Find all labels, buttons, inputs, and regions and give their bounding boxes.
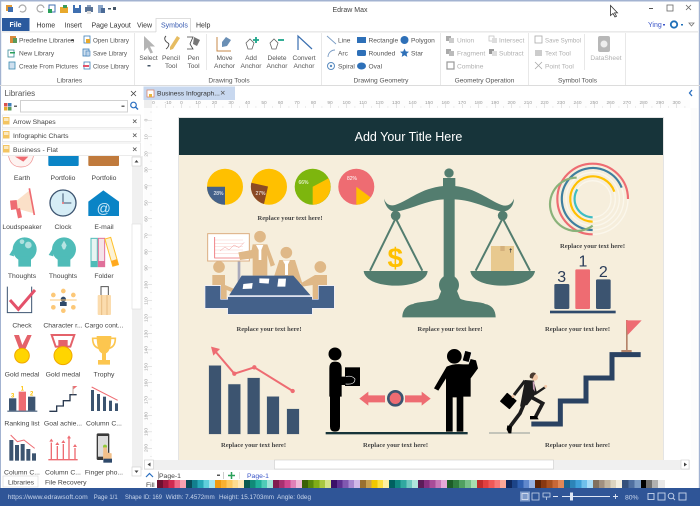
chart: ranking podium: 3 bbox=[557, 269, 566, 286]
ribbon group: drawing tools: Pen bbox=[188, 55, 200, 62]
title banner: Add Your Title Here bbox=[355, 130, 462, 144]
horizontal ruler: 140 bbox=[408, 100, 417, 106]
ribbon group: geometry operation: Fragment bbox=[457, 50, 485, 58]
icon: ranking list: 3 bbox=[11, 393, 15, 399]
document tab bar bbox=[143, 86, 698, 100]
icon: column chart 2 bbox=[9, 435, 36, 461]
ribbon group: geometry operation: Geometry Operation bbox=[455, 78, 515, 84]
icon: select arrow bbox=[144, 36, 155, 54]
icon: pencil tool bbox=[165, 36, 180, 50]
chart: ranking podium bbox=[550, 254, 616, 313]
ribbon group: drawing geometry: Polygon bbox=[411, 38, 435, 44]
fit buttons bbox=[648, 493, 686, 500]
ribbon group: symbol tools bbox=[535, 36, 622, 84]
sidebar grid labels: Goal achie... bbox=[44, 420, 82, 428]
vertical ruler: 130 bbox=[144, 330, 150, 338]
vertical ruler: 60 bbox=[144, 216, 150, 222]
vertical ruler: 200 bbox=[144, 444, 150, 452]
horizontal ruler: 260 bbox=[606, 100, 615, 106]
app title: Edraw Max bbox=[332, 7, 368, 14]
illustration: businessman climbing stairs bbox=[489, 320, 642, 434]
icon: ranking list bbox=[7, 387, 37, 412]
ribbon group: drawing tools: Tool bbox=[165, 63, 178, 70]
sidebar grid labels: Finger pho... bbox=[85, 470, 123, 476]
ribbon group: drawing tools bbox=[139, 36, 316, 84]
pie 27%: 27% bbox=[256, 191, 266, 197]
horizontal ruler: 180 bbox=[474, 100, 483, 106]
vertical ruler: 190 bbox=[144, 428, 150, 436]
icon: pen tool bbox=[187, 37, 200, 49]
sidebar grid: first row shapes bbox=[8, 155, 119, 267]
sidebar grid: lower shapes bbox=[7, 287, 118, 463]
horizontal ruler: 170 bbox=[458, 100, 466, 106]
icon: goal achievement bbox=[49, 386, 77, 411]
ribbon group: drawing tools: Anchor bbox=[214, 63, 236, 70]
horizontal ruler bbox=[144, 100, 690, 108]
quick access toolbar bbox=[6, 5, 116, 14]
flag bbox=[621, 320, 642, 353]
vertical ruler: 0 bbox=[144, 118, 150, 121]
icon: e-mail: @ bbox=[97, 200, 111, 216]
ribbon tabs bbox=[2, 18, 211, 32]
sidebar grid labels: Portfolio bbox=[51, 175, 76, 182]
panel: infographic page bbox=[178, 117, 664, 460]
businessman bbox=[500, 372, 547, 433]
icon: move anchor bbox=[217, 37, 231, 51]
caption: rings: Replace your text here! bbox=[560, 243, 625, 250]
sidebar grid labels: Column C... bbox=[86, 420, 122, 428]
vertical ruler: 90 bbox=[144, 265, 150, 271]
horizontal ruler: 240 bbox=[573, 100, 582, 106]
vertical ruler: 110 bbox=[144, 297, 150, 305]
status text: Width: 7.4572mm bbox=[166, 494, 215, 501]
icon: trophy bbox=[93, 336, 115, 365]
ribbon group: libraries: Create From Pictures bbox=[19, 64, 79, 70]
horizontal ruler: 40 bbox=[245, 100, 250, 106]
horizontal ruler: 80 bbox=[311, 100, 316, 106]
zoom slider: 80% bbox=[625, 494, 639, 502]
icon: thoughts head 2 bbox=[49, 237, 76, 267]
horizontal ruler: 120 bbox=[375, 100, 384, 106]
pie 66%: 66% bbox=[298, 180, 309, 186]
horizontal ruler: 10 bbox=[195, 100, 201, 106]
icon: mouse cursor bbox=[610, 6, 618, 17]
horizontal ruler: 210 bbox=[524, 100, 532, 106]
icon: folder binders bbox=[91, 237, 119, 267]
panel: libraries sidebar bbox=[1, 86, 143, 488]
vertical ruler: 170 bbox=[144, 396, 150, 404]
sidebar grid labels: Trophy bbox=[94, 372, 115, 378]
ribbon tabs: View bbox=[137, 22, 153, 30]
ribbon group: drawing geometry: Oval bbox=[368, 64, 383, 70]
vertical ruler: 30 bbox=[144, 167, 150, 173]
ribbon group: libraries: New Library bbox=[19, 50, 55, 58]
horizontal ruler: 190 bbox=[491, 100, 499, 106]
icon: finger on phone bbox=[97, 433, 112, 463]
ribbon group: drawing tools: Add bbox=[245, 55, 257, 62]
active symbols tab bbox=[156, 18, 190, 32]
icon: dollar sign: $ bbox=[388, 242, 404, 273]
ribbon group: drawing tools: Anchor bbox=[294, 63, 315, 70]
file tab bbox=[2, 18, 30, 31]
ribbon group: drawing tools: Anchor bbox=[267, 63, 288, 70]
sidebar grid labels: Folder bbox=[94, 273, 114, 280]
sidebar grid labels: E-mail bbox=[94, 224, 114, 231]
icon: datasheet bbox=[598, 36, 610, 52]
horizontal ruler: 20 bbox=[212, 100, 217, 106]
vertical ruler: 40 bbox=[144, 184, 150, 190]
illustration: business meeting bbox=[205, 231, 334, 314]
icon: clock bbox=[50, 190, 76, 216]
horizontal ruler: 220 bbox=[540, 100, 549, 106]
ribbon group: symbol tools: Save Symbol bbox=[545, 38, 581, 44]
ribbon tabs: Page Layout bbox=[92, 22, 131, 30]
ribbon group: symbol tools: Symbol Tools bbox=[558, 78, 598, 84]
sidebar bottom tabs: Libraries bbox=[8, 480, 35, 486]
horizontal ruler: 150 bbox=[425, 100, 433, 106]
vertical ruler: 50 bbox=[144, 200, 150, 206]
ribbon group: libraries: Predefine Libraries bbox=[19, 38, 75, 44]
library row: infographic charts bbox=[2, 129, 140, 142]
horizontal ruler: 300 bbox=[672, 100, 681, 106]
sidebar grid labels: Gold medal bbox=[46, 372, 81, 378]
ribbon group: drawing tools: Delete bbox=[267, 55, 287, 62]
sidebar grid labels: Ranking list bbox=[4, 420, 40, 428]
pie 27% bbox=[251, 169, 287, 205]
title banner bbox=[179, 118, 663, 155]
ribbon group: geometry operation: Union bbox=[457, 38, 475, 44]
horizontal ruler: 0 bbox=[152, 100, 155, 106]
sidebar grid labels: Character r... bbox=[43, 322, 83, 330]
horizontal ruler: -10 bbox=[165, 100, 172, 106]
chart: radial progress rings bbox=[550, 164, 628, 234]
ribbon group: drawing geometry: Spiral bbox=[338, 64, 355, 70]
ribbon group: drawing geometry: Drawing Geometry bbox=[354, 78, 409, 84]
vertical ruler: 20 bbox=[144, 151, 150, 157]
ribbon group: drawing geometry: Star bbox=[411, 50, 424, 58]
person with document bbox=[328, 347, 360, 432]
illustration: balance scale bbox=[364, 168, 535, 317]
status text: Angle: 0deg bbox=[277, 494, 311, 501]
colour palette bbox=[157, 480, 665, 488]
stairs bbox=[531, 355, 641, 424]
icon: gold medal ribbon bbox=[52, 335, 74, 365]
horizontal ruler: 70 bbox=[294, 100, 300, 106]
ribbon group: libraries: Libraries bbox=[57, 78, 83, 84]
sidebar grid labels bbox=[2, 175, 124, 476]
pie 82% bbox=[338, 169, 374, 205]
library row: arrow shapes: Arrow Shapes bbox=[13, 119, 56, 126]
sidebar grid labels: Cargo cont... bbox=[85, 322, 124, 330]
icon: earth bbox=[8, 155, 34, 167]
icon: thoughts head 1 bbox=[9, 237, 37, 267]
illustration: two people exchange bbox=[326, 347, 478, 434]
user menu: Ying bbox=[648, 22, 662, 29]
ribbon group: symbol tools: DataSheet bbox=[590, 55, 622, 62]
ribbon group: symbol tools: Point Tool bbox=[545, 64, 574, 70]
library row: arrow shapes bbox=[2, 115, 140, 128]
library row: infographic charts: Infographic Charts bbox=[13, 133, 69, 140]
icon: check bbox=[7, 287, 35, 313]
window controls bbox=[648, 5, 694, 29]
icon: character relation bbox=[50, 289, 77, 313]
sidebar grid labels: Column C... bbox=[45, 470, 81, 476]
horizontal ruler: 200 bbox=[507, 100, 516, 106]
horizontal ruler: 160 bbox=[441, 100, 450, 106]
ribbon group: geometry operation: Intersect bbox=[499, 38, 524, 44]
ribbon group: geometry operation: Combine bbox=[457, 64, 484, 70]
view buttons bbox=[520, 492, 550, 502]
ribbon group: drawing geometry: Rectangle bbox=[368, 38, 399, 44]
vertical ruler bbox=[144, 108, 152, 460]
ribbon body bbox=[0, 32, 700, 86]
ribbon group: drawing tools: Select bbox=[139, 55, 158, 62]
horizontal ruler: 130 bbox=[392, 100, 400, 106]
vertical ruler: 140 bbox=[144, 346, 150, 354]
pie 28%: 28% bbox=[214, 191, 224, 197]
sidebar grid labels: Column C... bbox=[4, 470, 40, 476]
ribbon group: libraries: Save Library bbox=[93, 50, 128, 58]
chart: ranking podium: 2 bbox=[599, 264, 608, 281]
page tab bar: Fill bbox=[146, 482, 155, 489]
person on phone bbox=[434, 349, 478, 432]
file tab: File bbox=[9, 22, 22, 29]
sidebar bottom tabs bbox=[3, 476, 87, 487]
ribbon group: drawing tools: Pencil bbox=[162, 55, 181, 62]
chart: declining bar chart bbox=[209, 347, 299, 434]
ribbon tabs: Insert bbox=[64, 22, 82, 30]
ribbon group: symbol tools: Text Tool bbox=[545, 50, 571, 58]
caption: scale: Replace your text here! bbox=[418, 326, 482, 333]
icon: blue portfolio bbox=[48, 155, 79, 166]
horizontal ruler: 280 bbox=[639, 100, 648, 106]
sidebar bottom tabs: File Recovery bbox=[45, 480, 87, 486]
vertical ruler: 100 bbox=[144, 281, 150, 289]
active symbols tab: Symbols bbox=[161, 22, 188, 30]
caption: exchange: Replace your text here! bbox=[363, 442, 428, 449]
horizontal ruler: 0 bbox=[180, 100, 183, 106]
icon: brown portfolio bbox=[88, 155, 119, 166]
horizontal ruler: 30 bbox=[228, 100, 234, 106]
caption: bar chart: Replace your text here! bbox=[221, 442, 286, 449]
ribbon group: drawing geometry: Line bbox=[338, 38, 351, 44]
caption: pies: Replace your text here! bbox=[258, 215, 322, 222]
vertical ruler: 80 bbox=[144, 249, 150, 255]
caption: meeting: Replace your text here! bbox=[236, 326, 302, 333]
chart: ranking podium: 1 bbox=[579, 254, 588, 271]
sidebar header bbox=[1, 86, 143, 156]
library search box bbox=[4, 100, 138, 112]
library row: business flat bbox=[2, 143, 140, 156]
page tab bar: Page-1 bbox=[247, 473, 269, 480]
ribbon group: drawing tools: Anchor bbox=[241, 63, 262, 70]
document tab bbox=[144, 86, 235, 100]
horizontal ruler: 270 bbox=[623, 100, 631, 106]
icon: ranking list: 2 bbox=[30, 391, 34, 397]
icon: column chart with red arrows bbox=[48, 435, 78, 460]
horizontal ruler: 110 bbox=[359, 100, 367, 106]
pie 28% bbox=[207, 169, 243, 205]
horizontal ruler: 230 bbox=[557, 100, 565, 106]
horizontal ruler: 250 bbox=[590, 100, 598, 106]
sidebar grid labels: Check bbox=[12, 322, 32, 330]
vertical ruler: 180 bbox=[144, 412, 150, 420]
canvas workspace bbox=[152, 108, 690, 460]
ribbon tabs: Help bbox=[196, 22, 211, 30]
status text: Page 1/1 bbox=[94, 494, 118, 501]
trend arrow bbox=[211, 347, 295, 393]
pie 82%: 82% bbox=[347, 176, 358, 182]
icon: convert anchor bbox=[298, 36, 312, 50]
page tab bar: Page-1 bbox=[159, 473, 181, 480]
ribbon group: libraries bbox=[8, 36, 130, 84]
vertical ruler: 10 bbox=[144, 134, 150, 140]
ribbon group: libraries: Open Library bbox=[93, 38, 130, 44]
icon: gold medal bbox=[14, 335, 32, 363]
status text bbox=[8, 494, 311, 501]
ribbon group: drawing tools: Tool bbox=[187, 63, 200, 70]
sidebar header: Libraries bbox=[4, 89, 35, 98]
ribbon group: geometry operation bbox=[446, 36, 524, 84]
sidebar grid labels: Loudspeaker bbox=[2, 224, 42, 231]
horizontal ruler: 290 bbox=[656, 100, 664, 106]
sidebar grid labels: Thoughts bbox=[49, 273, 78, 280]
pie 66% bbox=[295, 169, 331, 205]
horizontal scrollbar bbox=[144, 108, 698, 470]
icon: cardboard box bbox=[491, 246, 514, 271]
ribbon group: libraries: Close Library bbox=[93, 64, 130, 70]
ribbon group: drawing tools: Convert bbox=[292, 55, 316, 62]
status bar bbox=[0, 488, 700, 506]
horizontal ruler: 60 bbox=[278, 100, 283, 106]
horizontal ruler: 100 bbox=[342, 100, 351, 106]
ribbon group: drawing geometry: Rounded bbox=[368, 50, 396, 58]
caption: stairs: Replace your text here! bbox=[545, 442, 610, 449]
ribbon group: drawing tools: Move bbox=[216, 55, 233, 62]
caption: podium: Replace your text here! bbox=[545, 326, 610, 333]
page tab bar bbox=[146, 472, 269, 489]
ribbon group: drawing tools: Drawing Tools bbox=[208, 78, 250, 84]
library row: business flat: Business - Flat bbox=[13, 147, 58, 154]
sidebar grid labels: Earth bbox=[14, 175, 30, 182]
sidebar grid labels: Thoughts bbox=[8, 273, 37, 280]
icon: cargo suitcase bbox=[98, 287, 111, 315]
ribbon group: drawing geometry: Arc bbox=[338, 50, 349, 58]
status text: Shape ID: 169 bbox=[125, 494, 162, 501]
icon: add anchor bbox=[246, 37, 259, 49]
icon: column chart bbox=[91, 387, 118, 411]
vertical ruler: 150 bbox=[144, 363, 150, 371]
icon: loudspeaker bbox=[10, 188, 34, 218]
ribbon group: geometry operation: Subtract bbox=[499, 50, 524, 58]
document tab: Business Infograph... bbox=[157, 90, 220, 98]
ribbon group: drawing geometry bbox=[327, 36, 435, 84]
zoom slider bbox=[553, 492, 639, 502]
sidebar grid labels: Clock bbox=[54, 224, 72, 231]
icon: delete anchor bbox=[270, 39, 284, 49]
vertical ruler: 120 bbox=[144, 314, 150, 322]
vertical ruler: 70 bbox=[144, 233, 150, 239]
sidebar grid labels: Portfolio bbox=[92, 175, 117, 182]
horizontal ruler: 50 bbox=[261, 100, 267, 106]
double arrow with circle bbox=[359, 391, 431, 406]
sidebar scrollbar bbox=[132, 156, 143, 476]
icon: ranking list: 1 bbox=[21, 387, 25, 393]
vertical ruler: 160 bbox=[144, 379, 150, 387]
status text: Height: 15.1703mm bbox=[219, 494, 274, 501]
sidebar grid labels: Gold medal bbox=[5, 372, 40, 378]
status text: https://www.edrawsoft.com bbox=[8, 494, 88, 501]
pie charts bbox=[207, 169, 374, 205]
horizontal ruler: 90 bbox=[327, 100, 333, 106]
ribbon tabs: Home bbox=[36, 22, 55, 30]
